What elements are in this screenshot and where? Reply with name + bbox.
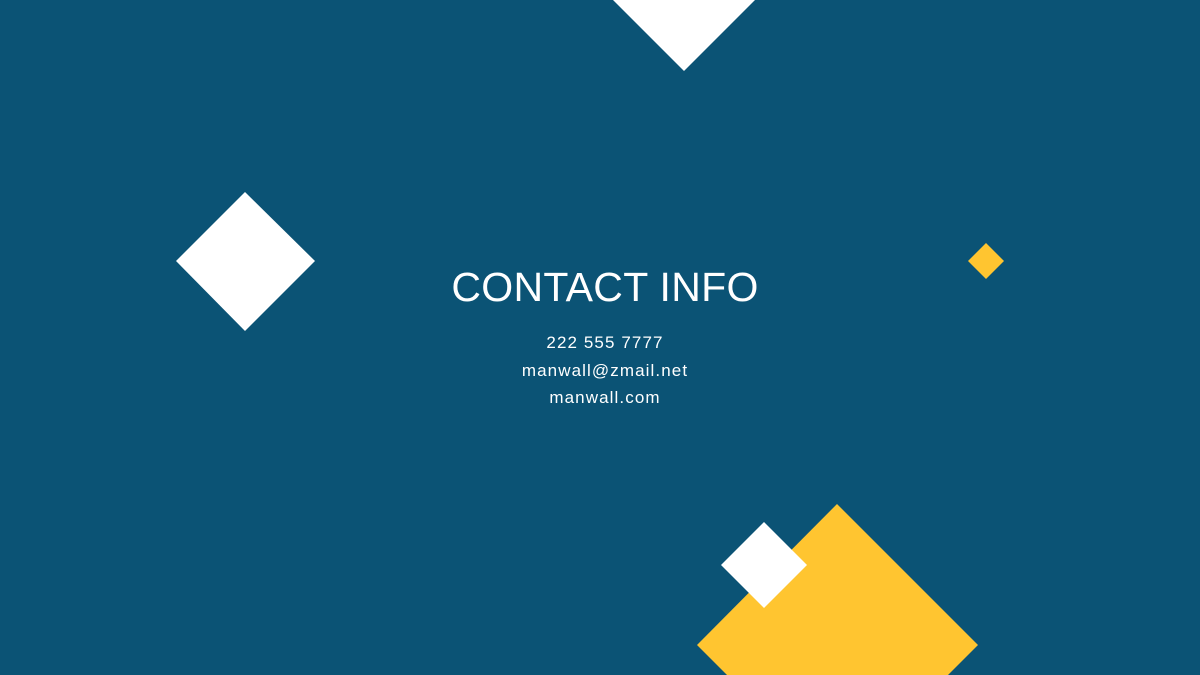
- shape: small white diamond: [721, 522, 807, 608]
- shape: large yellow diamond: [697, 504, 978, 675]
- shape: small yellow diamond: [968, 243, 1004, 279]
- contact details: [522, 333, 688, 407]
- shape: top white triangle: [613, 0, 755, 71]
- shape: left white diamond: [176, 192, 315, 331]
- contact details: manwall@zmail.net: [522, 360, 688, 380]
- title: CONTACT INFO: [451, 264, 759, 310]
- contact details: 222 555 7777: [546, 333, 664, 352]
- contact details: manwall.com: [549, 388, 661, 407]
